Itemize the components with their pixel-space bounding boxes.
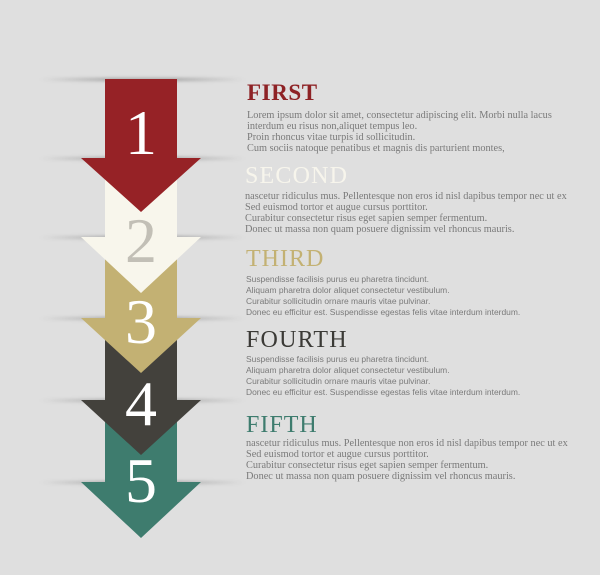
arrow 1: 1 xyxy=(125,97,157,168)
text block: fifth: FIFTH xyxy=(246,412,318,438)
arrow 3 xyxy=(81,237,201,373)
text block: third: Donec eu efficitur est. Suspendisse egestas felis vitae interdum interdum. xyxy=(246,307,520,317)
text block: fourth: Aliquam pharetra dolor aliquet consectetur vestibulum. xyxy=(246,365,450,375)
arrow 5 xyxy=(81,400,201,538)
text block: fifth: nascetur ridiculus mus. Pellentesque non eros id nisl dapibus tempor nec ut ex xyxy=(246,438,569,449)
arrow 4 xyxy=(81,318,201,455)
text block: second: Donec ut massa non quam posuere dignissim vel rhoncus mauris. xyxy=(245,224,514,235)
text block: second: SECOND xyxy=(245,163,348,189)
text block: first: Cum sociis natoque penatibus et magnis dis parturient montes, xyxy=(247,143,505,154)
text block: fourth: FOURTH xyxy=(246,327,348,353)
text block: first xyxy=(247,80,552,154)
text block: fourth: Curabitur sollicitudin ornare mauris vitae pulvinar. xyxy=(246,376,430,386)
text block: second: Curabitur consectetur risus eget sapien semper fermentum. xyxy=(245,213,487,224)
text block: fifth: Curabitur consectetur risus eget sapien semper fermentum. xyxy=(246,460,488,471)
text block: first: interdum eu risus non,aliquet tempus leo. xyxy=(247,121,417,132)
text block: second xyxy=(245,163,568,235)
text block: third: Aliquam pharetra dolor aliquet consectetur vestibulum. xyxy=(246,285,450,295)
text block: fourth xyxy=(246,327,520,397)
arrow 2: 2 xyxy=(125,205,157,276)
arrow 4: 4 xyxy=(125,368,157,439)
arrow 5: 5 xyxy=(125,445,157,516)
text block: first: Lorem ipsum dolor sit amet, consectetur adipiscing elit. Morbi nulla lacus xyxy=(247,110,552,121)
text block: third: THIRD xyxy=(246,246,324,272)
text block: third xyxy=(246,246,520,317)
text block: third: Suspendisse facilisis purus eu pharetra tincidunt. xyxy=(246,274,429,284)
text block: fifth xyxy=(246,412,569,482)
text block: second: Sed euismod tortor et augue cursus porttitor. xyxy=(245,202,428,213)
text block: fifth: Sed euismod tortor et augue cursus porttitor. xyxy=(246,449,429,460)
text block: third: Curabitur sollicitudin ornare mauris vitae pulvinar. xyxy=(246,296,430,306)
arrow 2 xyxy=(81,158,201,293)
text block: fourth: Donec eu efficitur est. Suspendisse egestas felis vitae interdum interdum. xyxy=(246,387,520,397)
text block: fifth: Donec ut massa non quam posuere dignissim vel rhoncus mauris. xyxy=(246,471,515,482)
arrow 3: 3 xyxy=(125,286,157,357)
text block: first: FIRST xyxy=(247,80,318,105)
text block: first: Proin rhoncus vitae turpis id sollicitudin. xyxy=(247,132,415,143)
text block: second: nascetur ridiculus mus. Pellentesque non eros id nisl dapibus tempor nec ut ex xyxy=(245,191,568,202)
arrow 1 xyxy=(81,79,201,212)
text block: fourth: Suspendisse facilisis purus eu pharetra tincidunt. xyxy=(246,354,429,364)
